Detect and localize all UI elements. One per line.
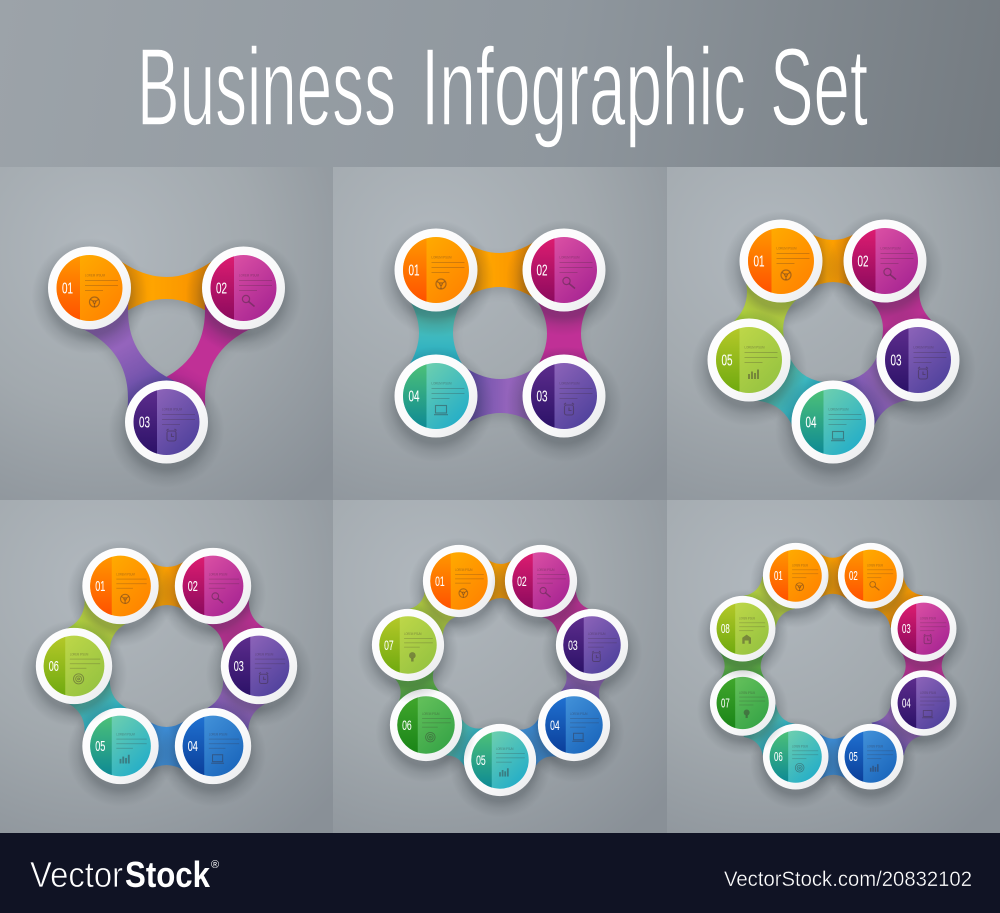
node 01: 01 <box>95 579 105 595</box>
node 01: 01 <box>435 573 445 589</box>
node 03: 03 <box>568 637 578 653</box>
node 06: LOREM IPSUM <box>792 745 808 749</box>
node 03 <box>878 589 970 681</box>
panel: eight-step cycle <box>667 500 1000 833</box>
title: Infographic <box>421 26 746 149</box>
node 06 <box>750 717 842 809</box>
node 01: 01 <box>408 262 420 280</box>
node 04 <box>775 372 891 488</box>
node 03: 03 <box>536 388 548 406</box>
footer logo: ® <box>211 859 219 871</box>
node 03: 03 <box>902 622 911 636</box>
node 03: LOREM IPSUM <box>914 344 934 350</box>
connectors: four-step <box>408 242 592 429</box>
node 05: 05 <box>95 739 105 755</box>
node 01: 01 <box>62 280 73 298</box>
node 04: LOREM IPSUM <box>920 691 936 695</box>
node 02: 02 <box>858 254 869 270</box>
node 02: 02 <box>216 280 227 298</box>
node 05: 05 <box>722 352 733 370</box>
node 01 <box>723 211 839 327</box>
node 07 <box>358 602 458 702</box>
node 04: 04 <box>806 414 817 432</box>
node 03: LOREM IPSUM <box>560 380 580 386</box>
node 05 <box>450 716 550 817</box>
node 06: 06 <box>774 750 783 764</box>
node 02: LOREM IPSUM <box>537 568 555 572</box>
node 07: 07 <box>384 637 394 653</box>
node 05 <box>67 700 174 807</box>
node 01: LOREM IPSUM <box>792 564 808 568</box>
panel: three-step cycle <box>0 167 333 500</box>
node 05 <box>825 717 917 809</box>
node 05: LOREM IPSUM <box>116 732 135 736</box>
title: Business <box>137 26 396 149</box>
node 07: LOREM IPSUM <box>404 632 422 636</box>
node 01: 01 <box>774 569 783 583</box>
node 02 <box>491 538 591 638</box>
node 03 <box>108 372 224 488</box>
node 01: LOREM IPSUM <box>85 272 105 278</box>
node 03: LOREM IPSUM <box>255 652 273 656</box>
node 02: LOREM IPSUM <box>867 564 883 568</box>
node 04: 04 <box>550 717 560 733</box>
node 02 <box>506 220 622 336</box>
node 03 <box>206 620 312 727</box>
panel: five-step cycle <box>667 167 1000 500</box>
node 03 <box>506 346 622 462</box>
footer logo <box>30 854 219 895</box>
node 01 <box>750 536 842 628</box>
node 05: LOREM IPSUM <box>744 344 764 350</box>
node 04: LOREM IPSUM <box>828 406 848 412</box>
node 04 <box>160 700 266 807</box>
node 05: 05 <box>476 752 486 768</box>
footer image id: VectorStock.com/20832102 <box>724 868 972 891</box>
node 04: LOREM IPSUM <box>570 712 588 716</box>
node 02: 02 <box>517 573 527 589</box>
node 04 <box>378 346 494 462</box>
node 07: 07 <box>721 696 730 710</box>
node 01: LOREM IPSUM <box>116 572 135 576</box>
node 03: 03 <box>234 659 244 675</box>
node 06 <box>376 682 476 782</box>
header band <box>0 0 1000 167</box>
node 05: LOREM IPSUM <box>867 745 883 749</box>
node 06: LOREM IPSUM <box>70 652 88 656</box>
node 02 <box>827 211 943 327</box>
node 03: LOREM IPSUM <box>920 617 936 621</box>
footer bar <box>0 833 1000 913</box>
node 08 <box>697 589 789 681</box>
node 05: LOREM IPSUM <box>496 747 514 751</box>
node 01 <box>67 540 174 647</box>
title: Set <box>770 26 868 149</box>
node 01: LOREM IPSUM <box>776 246 796 250</box>
node 01 <box>378 220 494 336</box>
node 02: 02 <box>536 262 548 280</box>
connectors: five-step <box>731 233 935 433</box>
node 02: LOREM IPSUM <box>880 246 900 250</box>
node 03: 03 <box>890 352 902 370</box>
node 08: 08 <box>721 622 730 636</box>
node 02 <box>825 536 917 628</box>
node 01: LOREM IPSUM <box>432 254 452 260</box>
panel: seven-step cycle <box>333 500 667 833</box>
node 04: LOREM IPSUM <box>432 380 452 386</box>
node 03 <box>860 310 976 426</box>
node 08: LOREM IPSUM <box>739 617 755 621</box>
node 06 <box>21 620 127 727</box>
node 03: LOREM IPSUM <box>588 632 606 636</box>
node 01: 01 <box>754 254 765 270</box>
title <box>137 26 868 149</box>
node 02 <box>186 238 302 354</box>
node 02: 02 <box>849 569 858 583</box>
node 01: LOREM IPSUM <box>455 568 473 572</box>
connectors: seven-step <box>389 556 610 777</box>
node 04: 04 <box>408 388 420 406</box>
node 02: LOREM IPSUM <box>560 254 580 260</box>
node 02: LOREM IPSUM <box>239 272 259 278</box>
connectors: eight-step <box>720 553 947 785</box>
node 04 <box>878 664 970 755</box>
panel: four-step cycle <box>333 167 667 500</box>
node 07: LOREM IPSUM <box>739 691 755 695</box>
node 03: LOREM IPSUM <box>162 406 182 412</box>
connectors: six-step <box>65 560 269 777</box>
panel: six-step cycle <box>0 500 333 833</box>
connectors: three-step <box>79 260 254 416</box>
node 02 <box>160 540 266 647</box>
node 01 <box>409 538 509 638</box>
node 03 <box>542 602 642 702</box>
node 02: 02 <box>188 579 198 595</box>
node 04: 04 <box>902 696 911 710</box>
node 04: 04 <box>188 739 198 755</box>
footer logo: Vector <box>30 854 123 895</box>
node 05 <box>691 310 807 426</box>
node 06: 06 <box>49 659 59 675</box>
node 03: 03 <box>139 414 150 432</box>
footer logo: Stock <box>125 854 211 895</box>
node 01 <box>32 238 148 354</box>
node 05: 05 <box>849 750 858 764</box>
node 02: LOREM IPSUM <box>209 572 227 576</box>
node 06: LOREM IPSUM <box>422 712 440 716</box>
node 04: LOREM IPSUM <box>209 732 227 736</box>
node 04 <box>524 682 624 782</box>
node 06: 06 <box>402 717 412 733</box>
node 07 <box>697 664 789 755</box>
